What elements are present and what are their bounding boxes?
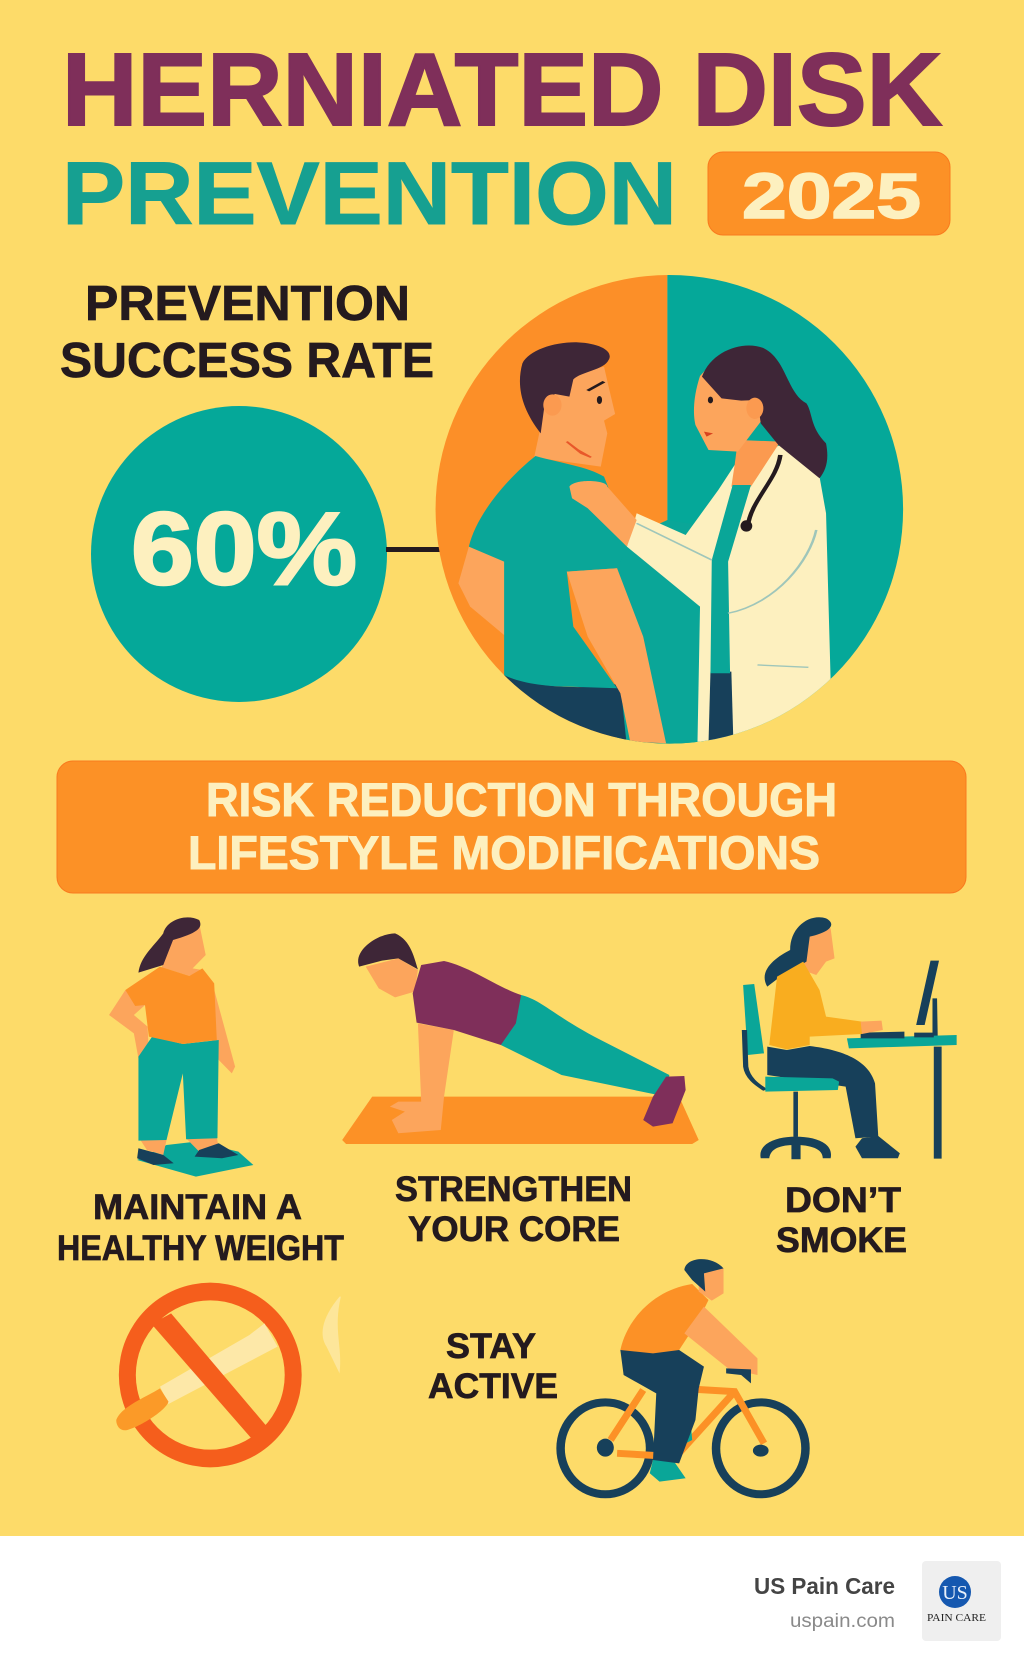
label: strengthen your core: STRENGTHEN [395,1170,632,1209]
illustration: plank on mat [342,933,699,1144]
label: stay active: ACTIVE [428,1367,558,1406]
year badge: 2025 [742,160,921,232]
illustration: patient and doctor [431,273,909,747]
title [62,32,950,243]
icon: no smoking [116,1283,341,1467]
label: maintain a healthy weight: MAINTAIN A [93,1188,302,1227]
brand url: uspain.com [790,1611,895,1632]
banner: risk reduction: LIFESTYLE MODIFICATIONS [188,826,820,879]
rider [620,1259,757,1482]
label: strengthen your core [395,1170,632,1249]
logo: PAIN CARE [927,1612,986,1624]
stat circle: 60% [91,406,387,702]
connector line [386,547,440,552]
label: strengthen your core: YOUR CORE [408,1210,620,1249]
doctor [569,345,849,747]
label: stay active: STAY [446,1327,536,1366]
illustration: woman on scale [109,917,253,1177]
year badge [708,152,950,235]
patient [458,342,709,747]
banner: risk reduction [57,761,966,893]
label: don't smoke [776,1181,907,1260]
banner: risk reduction: RISK REDUCTION THROUGH [206,773,837,826]
stat circle: 60%: 60% [131,491,357,606]
label: don't smoke: DON’T [785,1181,901,1220]
brand name: US Pain Care [754,1573,895,1599]
heading: prevention success rate: PREVENTION [85,277,410,331]
heading: prevention success rate: SUCCESS RATE [60,334,434,388]
label: don't smoke: SMOKE [776,1221,907,1260]
logo [922,1561,1001,1641]
bicycle [556,1388,810,1498]
illustration: woman at desk [743,917,957,1159]
heading: prevention success rate [60,277,434,388]
title line: prevention: PREVENTION [62,143,677,243]
logo: US [942,1582,968,1604]
title line: herniated disk: HERNIATED DISK [62,32,942,147]
label: maintain a healthy weight: HEALTHY WEIGHT [57,1229,344,1268]
label: stay active [428,1327,558,1406]
illustration: cyclist [556,1259,810,1498]
footer [0,1536,1024,1666]
label: maintain a healthy weight [57,1188,344,1268]
